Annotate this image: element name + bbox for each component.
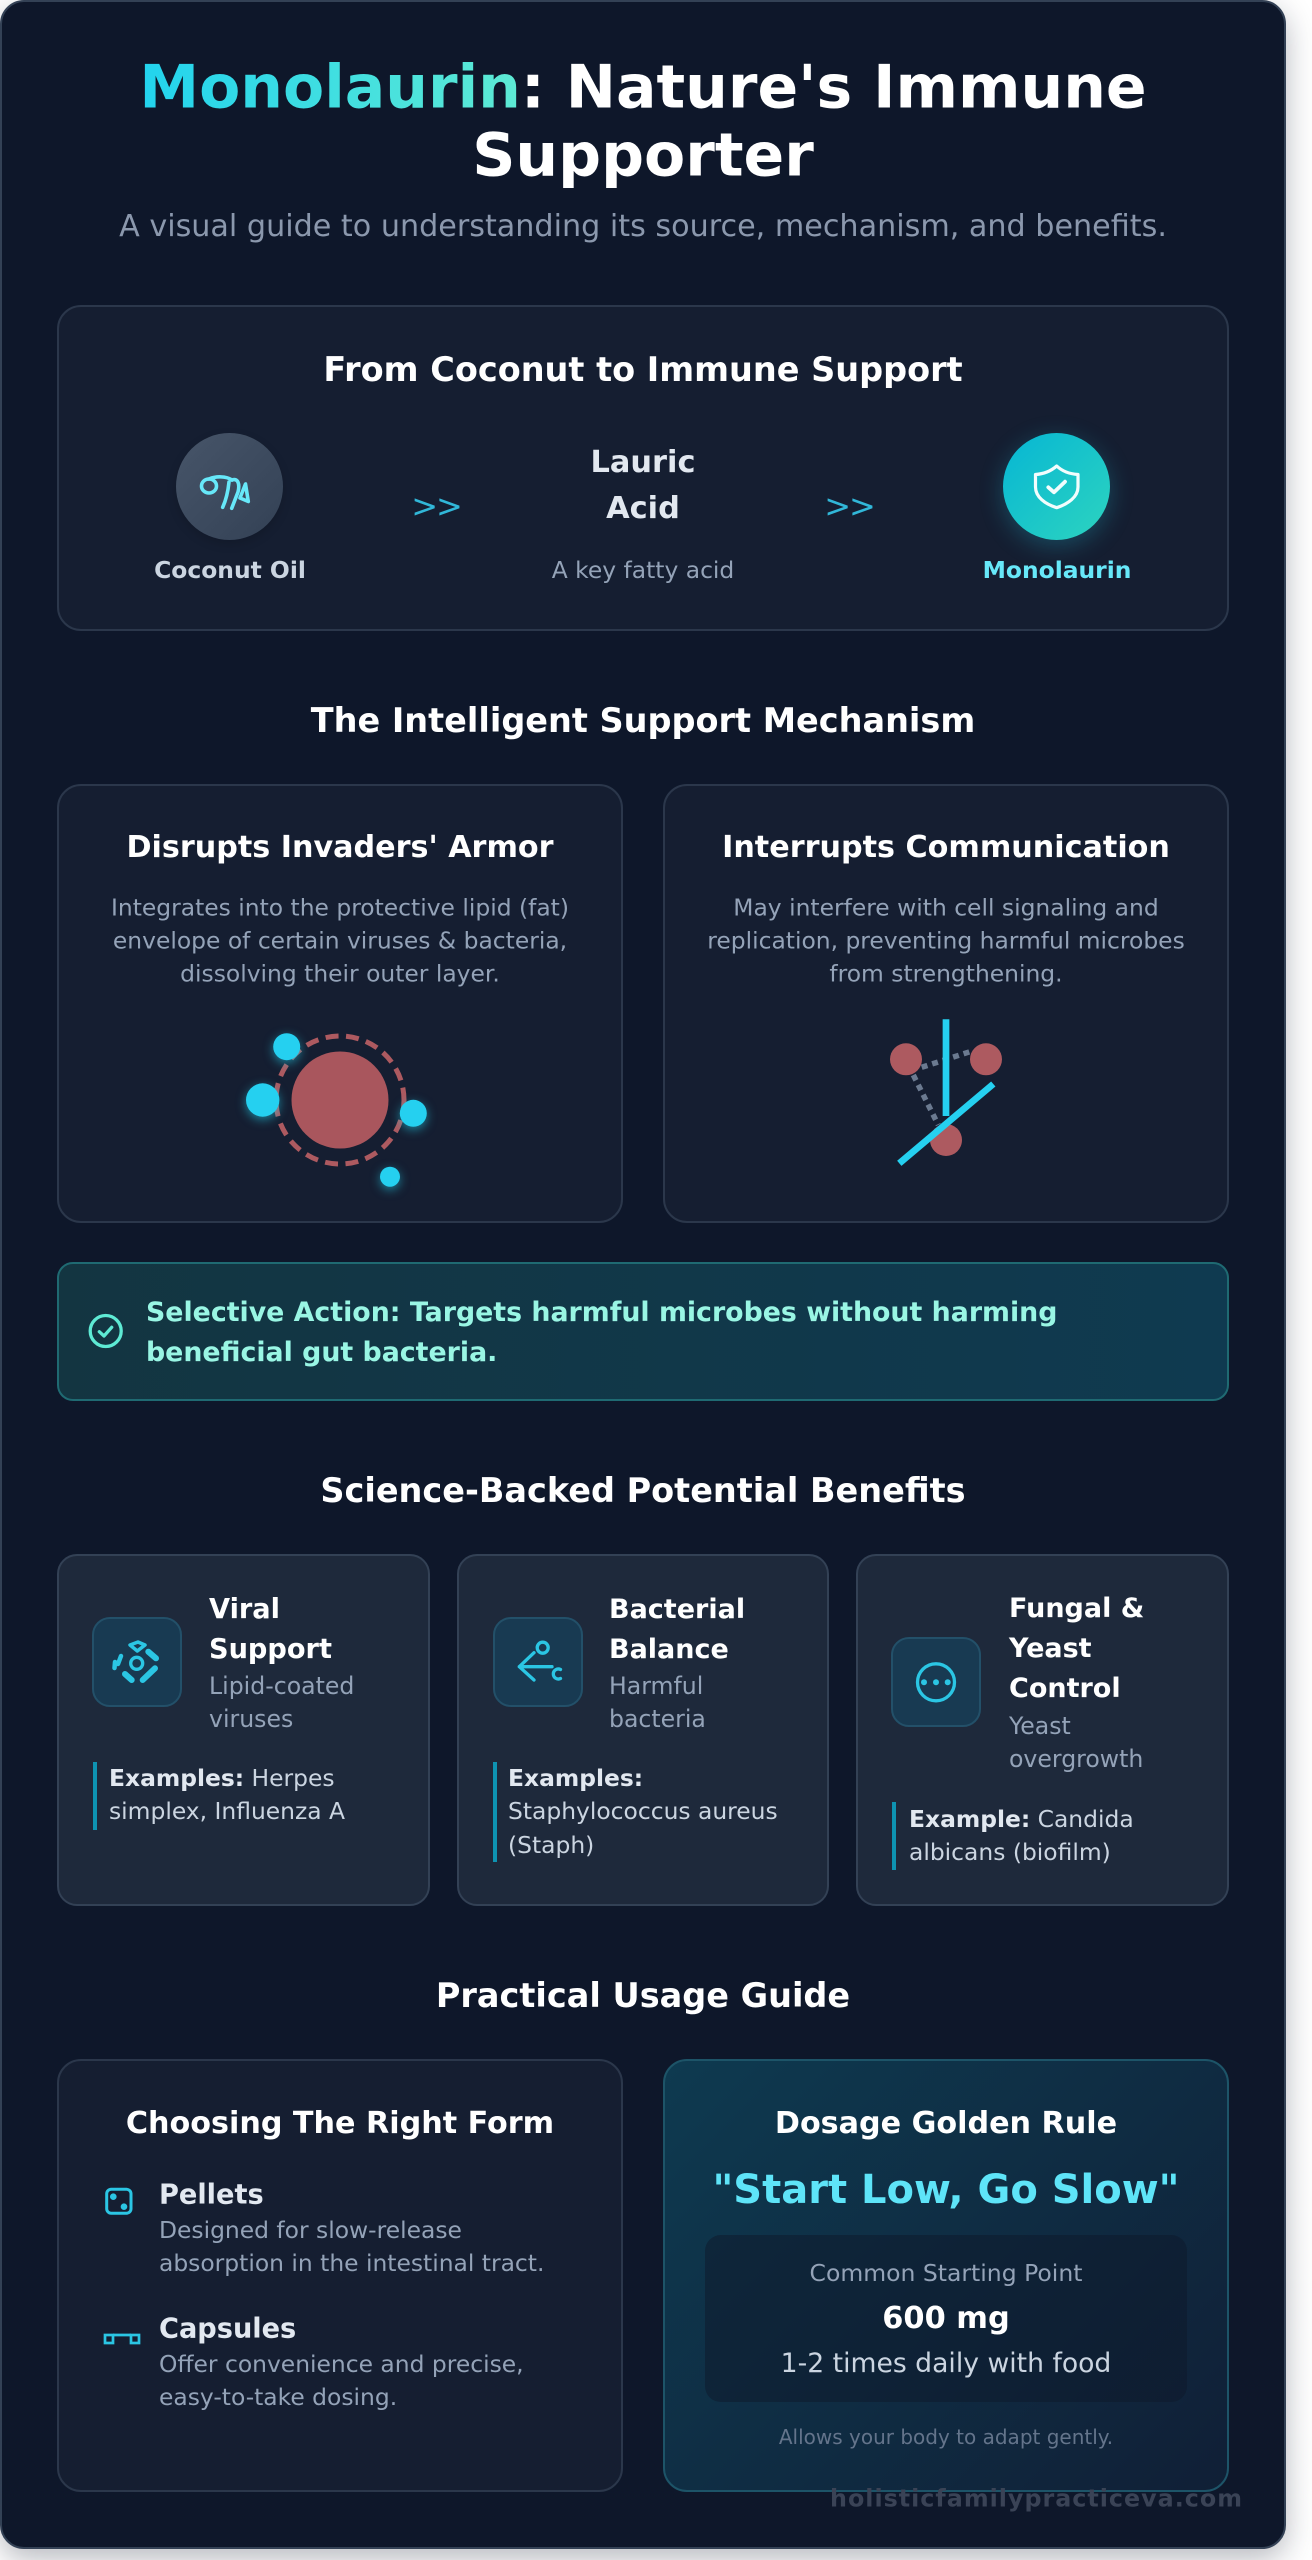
form description: pellets: absorption in the intestinal tract. bbox=[159, 2249, 544, 2277]
description: Integrates into the protective lipid (fat) bbox=[111, 894, 569, 922]
card subtitle bbox=[609, 1672, 706, 1732]
label: lauric acid bbox=[591, 444, 695, 526]
icon: virus bbox=[92, 1617, 182, 1707]
panel: choosing the right form bbox=[57, 2059, 623, 2492]
form description: capsules: easy-to-take dosing. bbox=[159, 2383, 397, 2411]
example note bbox=[892, 1802, 896, 1870]
card subtitle: Lipid-coated bbox=[209, 1672, 354, 1700]
card subtitle: viruses bbox=[209, 1704, 293, 1732]
form name: capsules: Capsules bbox=[159, 2314, 296, 2345]
callout text bbox=[146, 1296, 1057, 1368]
icon: fungus bbox=[891, 1637, 981, 1727]
card: viral support bbox=[57, 1554, 430, 1906]
icon: check circle bbox=[88, 1314, 123, 1348]
panel: dosage golden rule bbox=[663, 2059, 1229, 2492]
label: lauric acid: Acid bbox=[606, 490, 680, 526]
example text bbox=[508, 1763, 778, 1858]
example text: Staphylococcus aureus bbox=[508, 1797, 778, 1825]
panel heading: From Coconut to Immune Support bbox=[323, 349, 963, 388]
example text: simplex, Influenza A bbox=[109, 1797, 345, 1825]
arrow: to monolaurin: >> bbox=[824, 487, 874, 525]
card subtitle: Harmful bbox=[609, 1672, 703, 1700]
card subtitle: overgrowth bbox=[1009, 1744, 1143, 1772]
label: coconut oil: Coconut Oil bbox=[154, 556, 306, 584]
description bbox=[707, 894, 1185, 988]
description bbox=[111, 894, 569, 988]
callout: selective action bbox=[57, 1262, 1229, 1400]
label: monolaurin: Monolaurin bbox=[983, 556, 1131, 584]
example text bbox=[909, 1805, 1134, 1866]
subtitle: A visual guide to understanding its source, mechanism, and benefits. bbox=[119, 209, 1167, 244]
label: lauric acid: Lauric bbox=[591, 444, 695, 480]
dosage amount: 600 mg bbox=[882, 2301, 1010, 2336]
callout text: Selective Action: Targets harmful microbes without harming bbox=[146, 1296, 1057, 1328]
title: Supporter bbox=[472, 120, 814, 190]
description: replication, preventing harmful microbes bbox=[707, 926, 1185, 954]
icon: pellets bbox=[105, 2188, 132, 2215]
panel heading: Choosing The Right Form bbox=[126, 2105, 554, 2140]
dosage label: Common Starting Point bbox=[810, 2259, 1082, 2287]
form description: capsules bbox=[159, 2350, 524, 2411]
section heading: benefits: Science-Backed Potential Benefits bbox=[320, 1470, 966, 1509]
panel heading: Interrupts Communication bbox=[722, 829, 1170, 864]
panel heading: Dosage Golden Rule bbox=[775, 2105, 1117, 2140]
card subtitle: Yeast bbox=[1009, 1712, 1071, 1740]
caption: a key fatty acid: A key fatty acid bbox=[552, 556, 734, 584]
title bbox=[139, 52, 1147, 190]
form description: capsules: Offer convenience and precise, bbox=[159, 2350, 524, 2378]
description: dissolving their outer layer. bbox=[180, 960, 500, 988]
card title bbox=[609, 1594, 745, 1664]
example note bbox=[93, 1762, 97, 1830]
card title: Support bbox=[209, 1634, 332, 1664]
icon: capsules bbox=[104, 2334, 140, 2344]
callout text: beneficial gut bacteria. bbox=[146, 1336, 497, 1368]
card title: Viral bbox=[209, 1594, 280, 1624]
arrow: to lauric acid: >> bbox=[411, 487, 461, 525]
dosage frequency: 1-2 times daily with food bbox=[781, 2348, 1111, 2379]
card: bacterial balance bbox=[457, 1554, 829, 1906]
card subtitle: bacteria bbox=[609, 1704, 706, 1732]
example text: Example: Candida bbox=[909, 1805, 1134, 1833]
panel: disrupts invaders' armor bbox=[57, 784, 623, 1222]
card: fungal and yeast control bbox=[856, 1554, 1229, 1906]
icon: bacteria bbox=[493, 1617, 583, 1707]
dosage note: Allows your body to adapt gently. bbox=[779, 2425, 1113, 2449]
description: from strengthening. bbox=[829, 960, 1063, 988]
card subtitle bbox=[209, 1672, 354, 1732]
diagram: microbes attacking lipid envelope bbox=[240, 1030, 432, 1196]
card title: Yeast bbox=[1009, 1632, 1092, 1664]
title: Monolaurin: Nature's Immune bbox=[139, 52, 1147, 122]
diagram: disrupted cell signaling bbox=[890, 1019, 1002, 1166]
card subtitle bbox=[1009, 1712, 1143, 1772]
example text: Examples: bbox=[508, 1763, 643, 1791]
panel: from coconut to immune support bbox=[57, 305, 1229, 630]
icon: monolaurin shield bbox=[1003, 433, 1110, 540]
form description: pellets bbox=[159, 2216, 544, 2277]
section heading: usage guide: Practical Usage Guide bbox=[436, 1976, 850, 2015]
example note bbox=[493, 1762, 497, 1862]
description: envelope of certain viruses & bacteria, bbox=[113, 926, 567, 954]
icon: coconut oil bbox=[176, 433, 283, 540]
card title: Fungal & bbox=[1009, 1592, 1144, 1624]
panel: interrupts communication bbox=[663, 784, 1229, 1222]
panel heading: Disrupts Invaders' Armor bbox=[126, 829, 554, 864]
dosage box bbox=[705, 2235, 1187, 2402]
form description: pellets: Designed for slow-release bbox=[159, 2216, 462, 2244]
card title bbox=[209, 1594, 332, 1664]
card title: Balance bbox=[609, 1634, 729, 1664]
description: May interfere with cell signaling and bbox=[733, 894, 1159, 922]
section heading: mechanism: The Intelligent Support Mechanism bbox=[311, 700, 975, 739]
example text: Examples: Herpes bbox=[109, 1764, 335, 1792]
card title: Bacterial bbox=[609, 1594, 745, 1624]
example text bbox=[109, 1764, 345, 1825]
example text: (Staph) bbox=[508, 1830, 594, 1858]
watermark: holisticfamilypracticeva.com bbox=[830, 2485, 1243, 2513]
card title bbox=[1008, 1592, 1144, 1704]
card title: Control bbox=[1009, 1672, 1121, 1704]
form name: pellets: Pellets bbox=[159, 2180, 264, 2211]
example text: albicans (biofilm) bbox=[909, 1838, 1111, 1866]
golden rule quote: "Start Low, Go Slow" bbox=[712, 2167, 1180, 2213]
